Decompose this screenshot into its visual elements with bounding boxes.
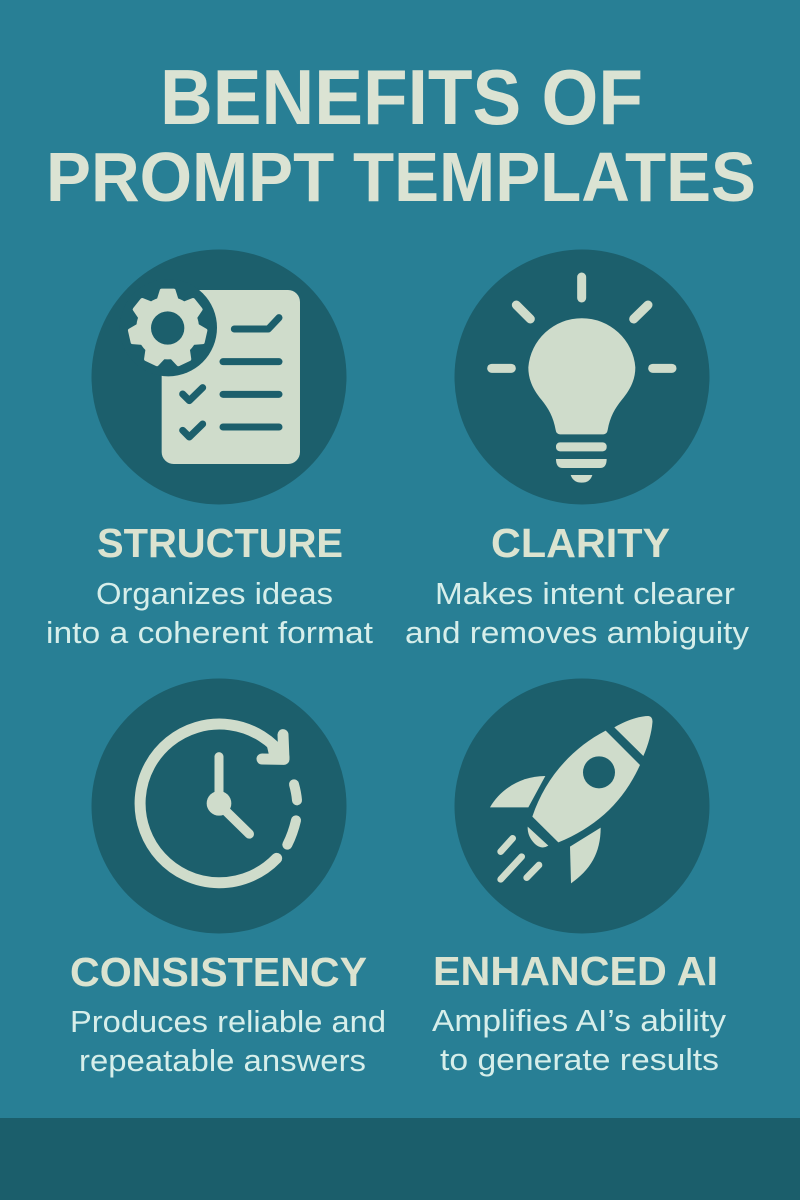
footer band: [0, 1118, 800, 1200]
heading: enhanced AI: ENHANCED AI: [433, 948, 718, 994]
panel: enhanced AI: [432, 678, 727, 1077]
title: BENEFITS OF: [160, 53, 643, 141]
heading: clarity: CLARITY: [491, 520, 670, 566]
panel: structure: [46, 250, 373, 650]
icon: clock with circular arrow: [92, 678, 346, 934]
text: enhanced AI description: to generate results: [440, 1042, 719, 1077]
text: clarity description: and removes ambiguity: [405, 615, 750, 650]
text: enhanced AI description: Amplifies AI’s ability: [432, 1003, 727, 1038]
panel: clarity: [405, 250, 750, 650]
text: clarity description: Makes intent clearer: [435, 576, 735, 611]
text: structure description: Organizes ideas: [96, 576, 333, 611]
icon: light bulb: [454, 250, 710, 504]
text: enhanced AI description: [432, 1003, 727, 1077]
text: clarity description: [405, 576, 750, 650]
text: structure description: [46, 576, 373, 650]
text: consistency description: repeatable answers: [79, 1043, 366, 1078]
title: [46, 53, 756, 216]
icon: checklist document with gear: [92, 250, 346, 504]
heading: consistency: CONSISTENCY: [70, 949, 367, 995]
icon: rocket: [454, 678, 710, 934]
panel: consistency: [70, 678, 386, 1078]
text: consistency description: Produces reliable and: [70, 1004, 386, 1039]
heading: structure: STRUCTURE: [97, 520, 343, 566]
title: PROMPT TEMPLATES: [46, 138, 756, 216]
text: structure description: into a coherent format: [46, 615, 373, 650]
text: consistency description: [70, 1004, 386, 1078]
